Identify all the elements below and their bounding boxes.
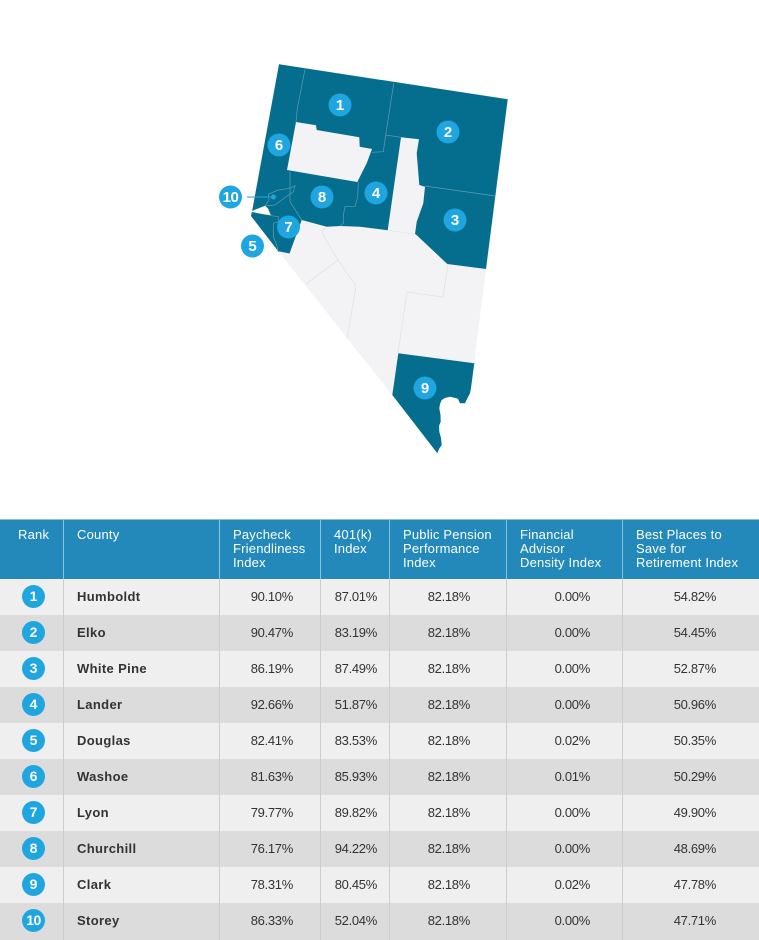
row 1: Humboldt: 90.10% bbox=[251, 589, 293, 604]
row 7: Lyon: 82.18% bbox=[428, 805, 470, 820]
row 1: Humboldt: Humboldt bbox=[77, 589, 140, 604]
row 2: Elko: 0.00% bbox=[555, 625, 590, 640]
marker 2: 2 bbox=[444, 124, 452, 141]
row 9: Clark: 0.02% bbox=[555, 877, 590, 892]
table header: Financial bbox=[520, 527, 574, 542]
row 7: Lyon: 79.77% bbox=[251, 805, 293, 820]
row 8: Churchill: 76.17% bbox=[251, 841, 293, 856]
marker 1 bbox=[328, 94, 352, 116]
row 2: Elko: 90.47% bbox=[251, 625, 293, 640]
row 7: Lyon: 0.00% bbox=[555, 805, 590, 820]
row 8: Churchill: 48.69% bbox=[674, 841, 716, 856]
row 7: Lyon: 49.90% bbox=[674, 805, 716, 820]
marker 3 bbox=[444, 208, 466, 232]
table header: Paycheck bbox=[233, 527, 291, 542]
row 1: Humboldt: 87.01% bbox=[335, 589, 377, 604]
marker 7: 7 bbox=[284, 219, 293, 236]
row 8: Churchill: 94.22% bbox=[335, 841, 377, 856]
row 7: Lyon bbox=[0, 795, 759, 831]
row 10: Storey: 47.71% bbox=[674, 913, 716, 928]
row 6: Washoe: 50.29% bbox=[674, 769, 716, 784]
row 6: Washoe: 0.01% bbox=[555, 769, 590, 784]
light counties: rest of state bbox=[251, 64, 508, 395]
marker 3: 3 bbox=[451, 212, 459, 229]
marker 8: 8 bbox=[318, 189, 326, 206]
row 4: Lander: Lander bbox=[77, 697, 122, 712]
row 4: Lander: 82.18% bbox=[428, 697, 470, 712]
marker 4 bbox=[364, 182, 388, 204]
row 4: Lander bbox=[0, 687, 759, 723]
row 5: Douglas: 82.18% bbox=[428, 733, 470, 748]
row 1: Humboldt: 54.82% bbox=[674, 589, 716, 604]
row 3: White Pine: 87.49% bbox=[335, 661, 377, 676]
row 8: Churchill: 0.00% bbox=[555, 841, 590, 856]
table header: Density Index bbox=[520, 555, 601, 570]
map of Nevada counties bbox=[219, 64, 508, 454]
row 9: Clark bbox=[0, 867, 759, 903]
marker 1: 1 bbox=[336, 97, 344, 114]
row 5: Douglas: 83.53% bbox=[335, 733, 377, 748]
row 10: Storey: Storey bbox=[77, 913, 120, 928]
row 2: Elko: Elko bbox=[77, 625, 106, 640]
row 2: Elko bbox=[0, 615, 759, 651]
teal counties: northern ranked group bbox=[251, 64, 508, 269]
table header: Index bbox=[334, 541, 367, 556]
table header: Index bbox=[403, 555, 436, 570]
row 5: Douglas bbox=[0, 723, 759, 759]
marker 5: 5 bbox=[248, 238, 257, 255]
row 10: Storey: 0.00% bbox=[555, 913, 590, 928]
row 9: Clark: 9 bbox=[30, 876, 37, 892]
row 6: Washoe: 82.18% bbox=[428, 769, 470, 784]
row 10: Storey: 52.04% bbox=[335, 913, 377, 928]
Pershing county cutout bbox=[287, 122, 372, 182]
table header: Performance bbox=[403, 541, 480, 556]
row 1: Humboldt: 0.00% bbox=[555, 589, 590, 604]
row 6: Washoe bbox=[0, 759, 759, 795]
row 9: Clark: 80.45% bbox=[335, 877, 377, 892]
row 2: Elko: 83.19% bbox=[335, 625, 377, 640]
row 3: White Pine: 82.18% bbox=[428, 661, 470, 676]
row 1: Humboldt: 82.18% bbox=[428, 589, 470, 604]
row 5: Douglas: Douglas bbox=[77, 733, 131, 748]
Carson City gap bbox=[252, 206, 271, 216]
row 6: Washoe: 6 bbox=[30, 768, 37, 784]
row 2: Elko: 54.45% bbox=[674, 625, 716, 640]
marker 9 bbox=[414, 376, 436, 400]
table header: County bbox=[77, 527, 119, 542]
row 6: Washoe: 85.93% bbox=[335, 769, 377, 784]
teal county: Clark bbox=[392, 353, 474, 453]
row 8: Churchill: Churchill bbox=[77, 841, 136, 856]
table header: Advisor bbox=[520, 541, 565, 556]
ranking table bbox=[0, 519, 759, 940]
table header: Save for bbox=[636, 541, 686, 556]
marker 6 bbox=[268, 134, 290, 156]
row 8: Churchill bbox=[0, 831, 759, 867]
marker 2 bbox=[436, 120, 460, 144]
row 2: Elko: 82.18% bbox=[428, 625, 470, 640]
marker 9: 9 bbox=[421, 380, 429, 397]
row 9: Clark: 78.31% bbox=[251, 877, 293, 892]
table header: 401(k) bbox=[334, 527, 372, 542]
row 7: Lyon: 89.82% bbox=[335, 805, 377, 820]
table header: Index bbox=[233, 555, 266, 570]
Eureka county cutout bbox=[388, 137, 425, 234]
row 5: Douglas: 0.02% bbox=[555, 733, 590, 748]
row 7: Lyon: 7 bbox=[30, 804, 37, 820]
row 10: Storey bbox=[0, 903, 759, 940]
row 3: White Pine: White Pine bbox=[77, 661, 147, 676]
table header: Friendliness bbox=[233, 541, 306, 556]
row 5: Douglas: 5 bbox=[30, 732, 37, 748]
row 1: Humboldt: 1 bbox=[30, 588, 37, 604]
table header: Retirement Index bbox=[636, 555, 738, 570]
row 10: Storey: 10 bbox=[26, 912, 41, 928]
table header: Public Pension bbox=[403, 527, 492, 542]
row 4: Lander: 51.87% bbox=[335, 697, 377, 712]
table header bbox=[0, 519, 759, 579]
row 5: Douglas: 50.35% bbox=[674, 733, 716, 748]
marker 5 bbox=[241, 234, 264, 258]
marker 10 with leader line: 10 bbox=[223, 189, 238, 206]
row 3: White Pine: 0.00% bbox=[555, 661, 590, 676]
marker 10 with leader line bbox=[219, 186, 276, 208]
row 2: Elko: 2 bbox=[30, 624, 37, 640]
row 9: Clark: Clark bbox=[77, 877, 111, 892]
row 7: Lyon: Lyon bbox=[77, 805, 109, 820]
row 4: Lander: 92.66% bbox=[251, 697, 293, 712]
marker 7 bbox=[277, 216, 300, 238]
row 8: Churchill: 8 bbox=[30, 840, 37, 856]
row 5: Douglas: 82.41% bbox=[251, 733, 293, 748]
row 6: Washoe: Washoe bbox=[77, 769, 128, 784]
row 10: Storey: 86.33% bbox=[251, 913, 293, 928]
row 6: Washoe: 81.63% bbox=[251, 769, 293, 784]
row 4: Lander: 0.00% bbox=[555, 697, 590, 712]
row 3: White Pine: 86.19% bbox=[251, 661, 293, 676]
row 1: Humboldt bbox=[0, 579, 759, 615]
marker 8 bbox=[310, 186, 334, 208]
row 9: Clark: 82.18% bbox=[428, 877, 470, 892]
row 8: Churchill: 82.18% bbox=[428, 841, 470, 856]
row 3: White Pine: 3 bbox=[30, 660, 37, 676]
row 3: White Pine: 52.87% bbox=[674, 661, 716, 676]
row 9: Clark: 47.78% bbox=[674, 877, 716, 892]
row 3: White Pine bbox=[0, 651, 759, 687]
row 4: Lander: 4 bbox=[30, 696, 37, 712]
row 4: Lander: 50.96% bbox=[674, 697, 716, 712]
table header: Rank bbox=[18, 527, 49, 542]
marker 4: 4 bbox=[372, 185, 381, 202]
table header: Best Places to bbox=[636, 527, 722, 542]
row 10: Storey: 82.18% bbox=[428, 913, 470, 928]
marker 6: 6 bbox=[275, 137, 283, 154]
